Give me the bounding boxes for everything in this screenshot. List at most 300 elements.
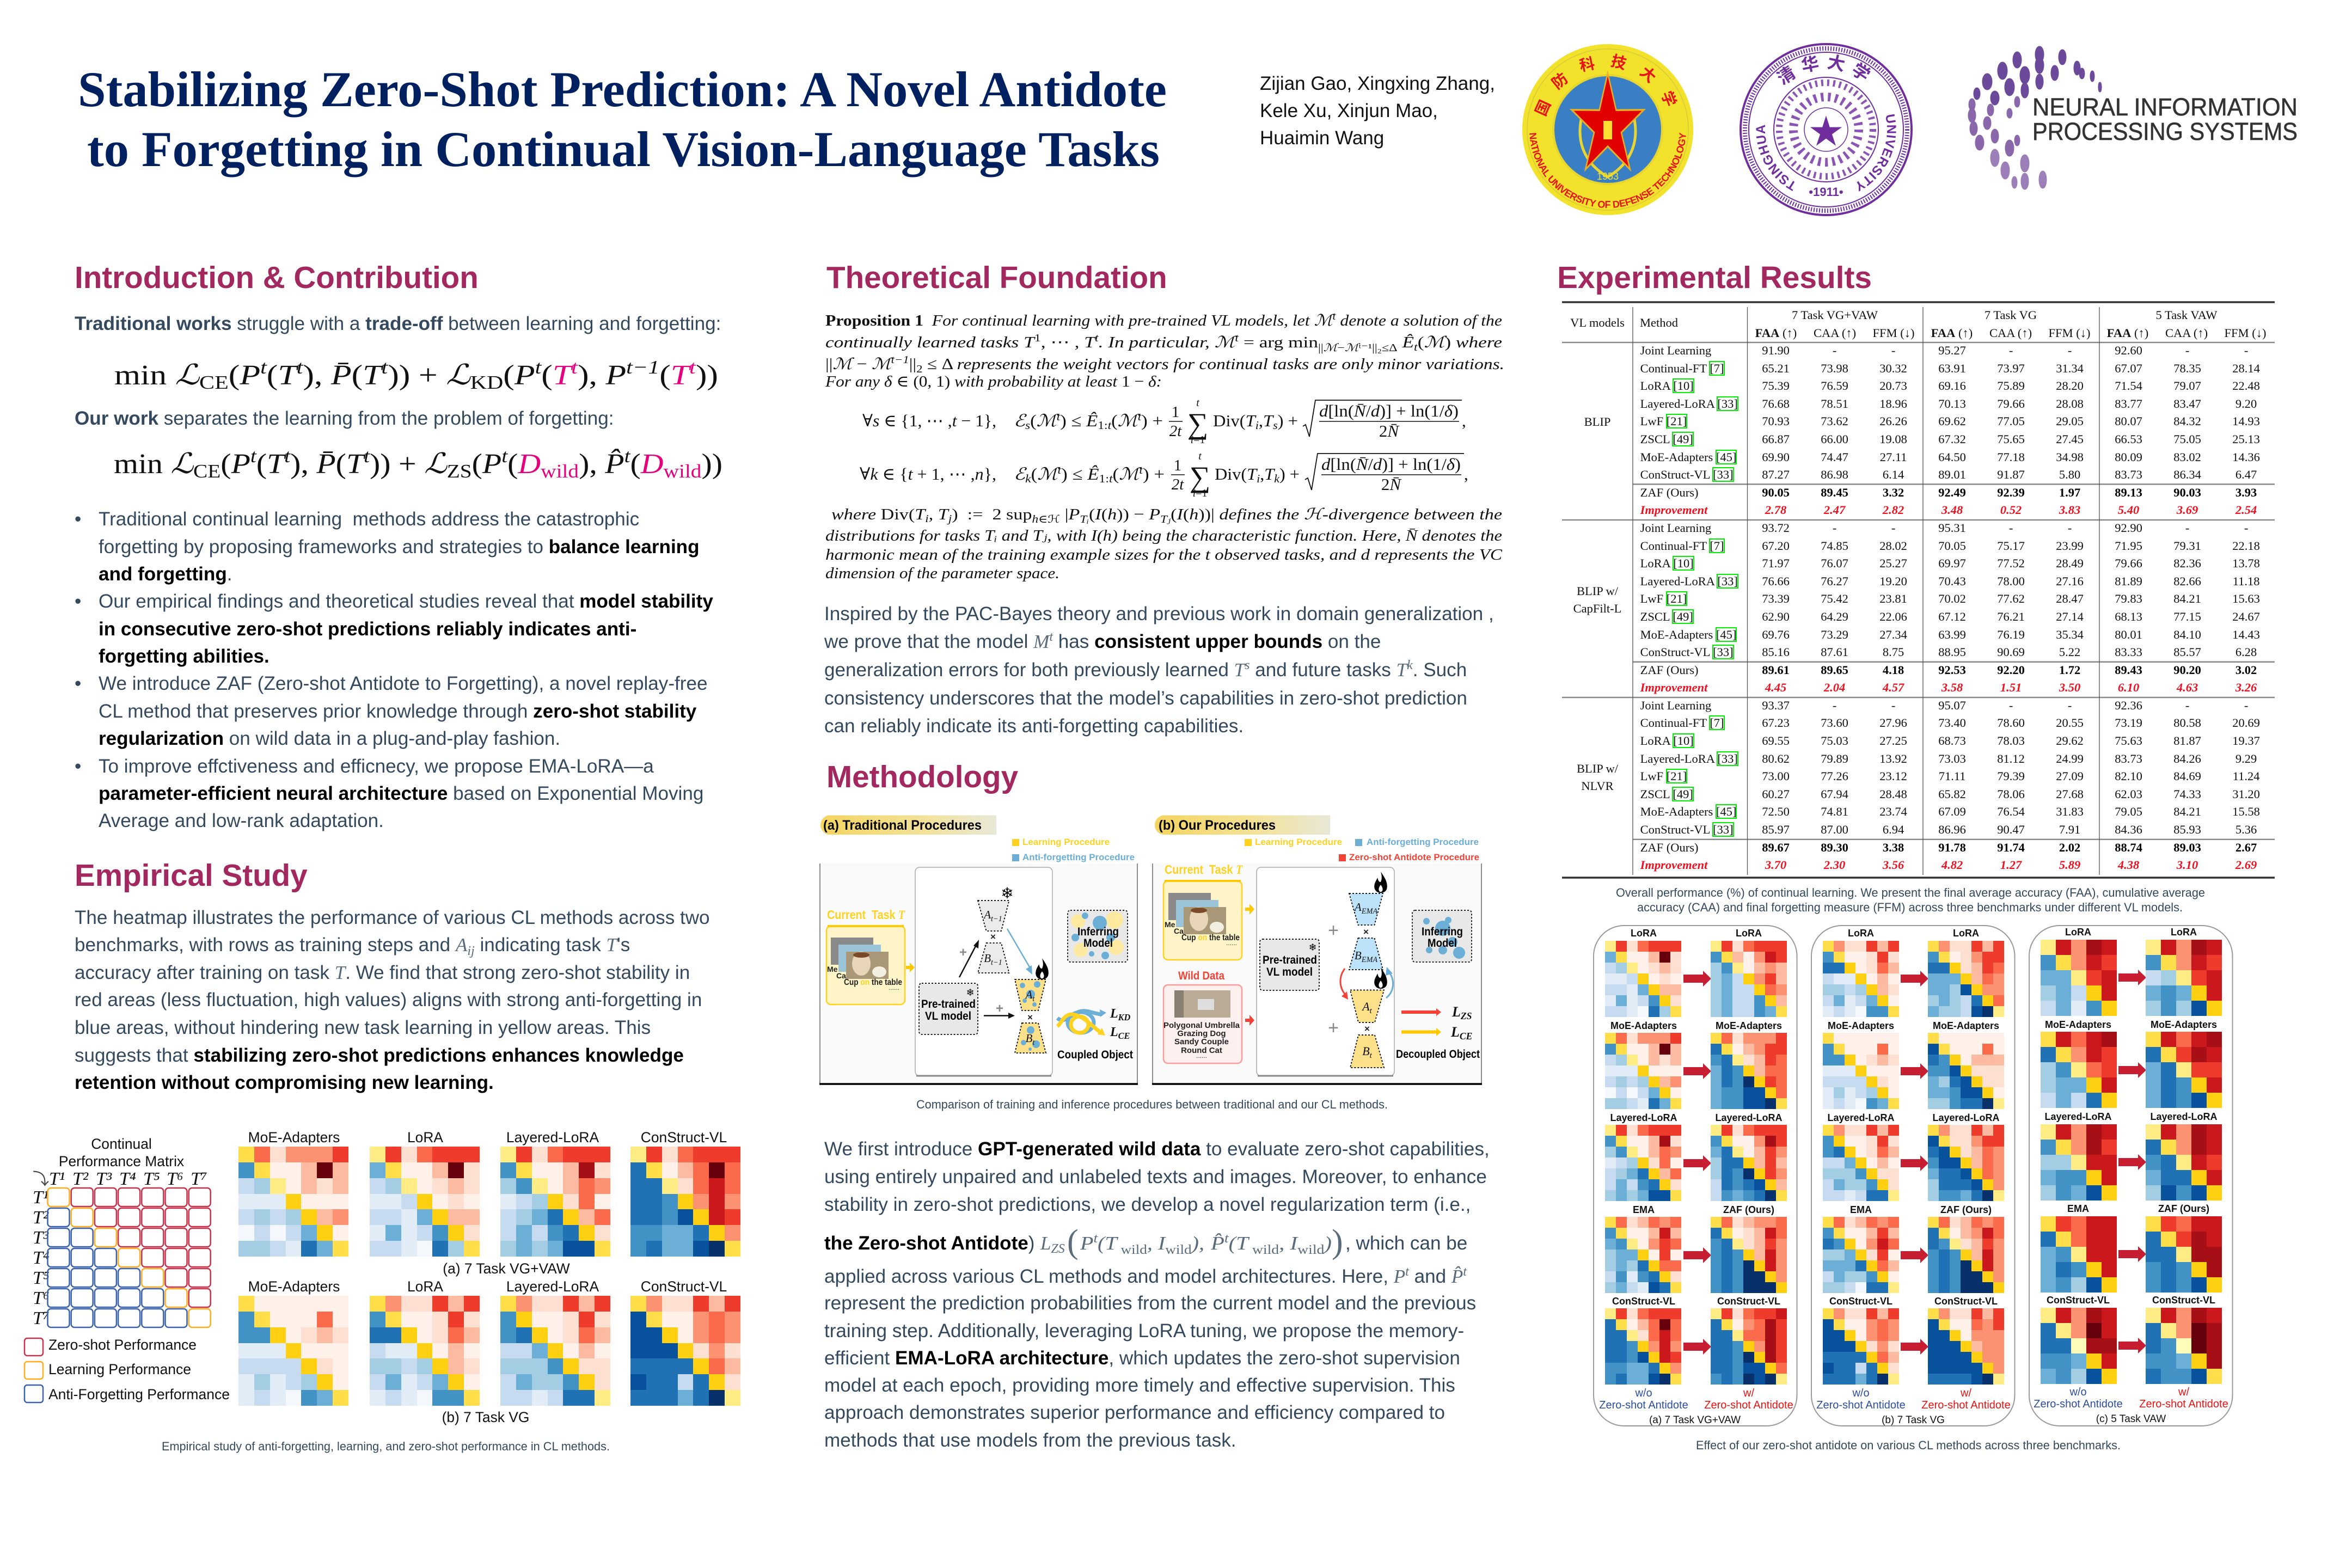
table: method rows and scores: 75.89: [1997, 379, 2025, 393]
equation: upper bound for previous tasks: ℰ: [1014, 411, 1027, 430]
diagram: continual performance matrix: Performance Matrix: [59, 1153, 184, 1169]
table: method rows and scores: 80.62: [1762, 752, 1790, 765]
table: method rows and scores: 92.90: [2115, 521, 2142, 535]
equation: upper bound for future tasks: i: [1257, 472, 1260, 485]
table: method rows and scores: 4.45: [1765, 681, 1786, 694]
table: method rows and scores: 73.98: [1821, 362, 1848, 375]
heat map: Layered-LoRA w/o: [2041, 1124, 2117, 1200]
table: method rows and scores: 3.32: [1883, 486, 1904, 499]
current LoRA blocks: B: [1362, 1044, 1370, 1058]
panel: (a) 7 Task VG+VAW antidote effect: LoRA: [1631, 928, 1657, 939]
table: method rows and scores: 78.00: [1997, 574, 2025, 588]
text: divergence definition: [825, 506, 1503, 582]
table: method rows and scores: 3.38: [1883, 841, 1904, 854]
text: methodology description: t: [1224, 1232, 1229, 1246]
table: method rows and scores: 27.45: [2056, 432, 2084, 446]
wild data box: Sandy Couple: [1174, 1037, 1229, 1046]
title: Stabilizing Zero-Shot Prediction: A Novel Antidote: [78, 62, 1167, 117]
text: methodology description: model at each epoch, providing more timely and effective supervision. This: [824, 1375, 1455, 1396]
heat map: Layered-LoRA w/o: [1605, 1125, 1681, 1201]
heat map: Layered-LoRA w/: [1928, 1125, 2004, 1201]
table: method rows and scores: Improvement: [1640, 503, 1707, 517]
text: divergence definition: h∈ℋ: [1032, 513, 1057, 525]
text: methodology description: and: [1409, 1266, 1451, 1287]
text: PAC-Bayes paragraph: generalization errors for both previously learned T: [824, 659, 1245, 681]
equation: upper bound for previous tasks: ℳ: [1118, 411, 1140, 430]
heat map: ConStruct-VL w/o: [1605, 1308, 1681, 1385]
table: method rows and scores: 93.37: [1762, 699, 1790, 712]
equation: our objective: (: [630, 449, 641, 480]
table: method rows and scores: 95.07: [1938, 699, 1966, 712]
inferring model: Model: [1428, 937, 1457, 950]
table: method rows and scores: 5.40: [2118, 503, 2139, 517]
decoupled losses: [1396, 1004, 1480, 1061]
table: method rows and scores: 6.28: [2235, 645, 2257, 659]
equation: our objective: min ℒ: [114, 449, 191, 480]
diagram: continual performance matrix: [33, 1136, 211, 1328]
table: method rows and scores: 22.48: [2232, 379, 2260, 393]
equation: traditional objective: t: [260, 356, 267, 378]
diagram: continual performance matrix: T⁴: [119, 1169, 136, 1189]
table: method rows and scores: 70.13: [1938, 397, 1966, 411]
equation: upper bound for future tasks: 2t: [1172, 476, 1184, 493]
equation: upper bound for future tasks: i=1: [1193, 487, 1207, 499]
logo: Tsinghua University: 清华大学: [1776, 54, 1871, 85]
heat map titles: ConStruct-VL: [641, 1129, 727, 1146]
logo: Tsinghua University: [1739, 43, 1913, 216]
table: method rows and scores: 20.73: [1879, 379, 1907, 393]
heat map: ZAF (Ours): [1928, 1217, 2004, 1293]
diagram: continual performance matrix: T²: [72, 1169, 89, 1189]
table: method rows and scores: -: [2185, 699, 2189, 712]
equation: upper bound for future tasks: ,: [1464, 464, 1468, 483]
table: method rows and scores: ConStruct-VL [33]: [1640, 823, 1734, 836]
table: method rows and scores: LwF [21]: [1640, 592, 1687, 605]
table: method rows and scores: 71.97: [1762, 556, 1790, 570]
table: method rows and scores: 76.66: [1762, 574, 1790, 588]
table: method rows and scores: 87.27: [1762, 468, 1790, 481]
panel: (a) 7 Task VG+VAW antidote effect: ZAF (Ours): [1723, 1204, 1774, 1215]
equation: upper bound for previous tasks: ℳ: [1037, 411, 1059, 430]
table: overall performance: FAA (↑): [1755, 326, 1797, 340]
text: methodology description: , which can be: [1345, 1233, 1467, 1254]
text: empirical study description: suggests that stabilizing zero-shot predictions enhances knowledge: [75, 1045, 684, 1066]
logo: Neural Information Processing Systems: NEURAL INFORMATION: [2032, 93, 2298, 121]
table: method rows and scores: 76.07: [1821, 556, 1848, 570]
text: proposition 1: denote a solution of the: [1336, 312, 1502, 329]
panel: (b) 7 Task VG antidote effect: ConStruct-VL: [1934, 1296, 1998, 1307]
heat map: ZAF (Ours): [2146, 1216, 2222, 1293]
bullet list: contributions: in consecutive zero-shot predictions reliably indicates anti-: [99, 618, 636, 640]
current task box: Ca: [836, 971, 846, 980]
table: method rows and scores: 78.60: [1997, 716, 2025, 730]
table: method rows and scores: 11.18: [2233, 574, 2259, 588]
diagram: continual performance matrix: T⁶: [33, 1288, 50, 1308]
text: methodology description: ZS: [1051, 1242, 1065, 1256]
table: method rows and scores: 77.26: [1821, 769, 1848, 783]
arrows: frozen and blue: +: [959, 945, 967, 960]
equation: upper bound for future tasks: ∑: [1190, 461, 1210, 493]
equation: upper bound for future tasks: ∀k ∈ {t + 1, ⋯ ,n},: [860, 464, 996, 483]
text: methodology description: ),: [1190, 1233, 1204, 1254]
inferring model: Model: [1083, 937, 1113, 950]
table: method rows and scores: MoE-Adapters [45]: [1640, 450, 1736, 464]
heat map: ConStruct-VL 7 Task VG: [630, 1296, 740, 1406]
table: overall performance: FFM (↓): [2225, 326, 2266, 340]
equation: upper bound for previous tasks: 1: [1172, 403, 1179, 421]
icon: flame: [1374, 872, 1387, 893]
equation: upper bound for previous tasks: d[ln(N̄/d)] + ln(1/δ): [1319, 401, 1459, 420]
wild data box: ......: [1196, 1052, 1207, 1059]
table: method rows and scores: -: [1891, 521, 1895, 535]
table: method rows and scores: 3.70: [1765, 858, 1786, 872]
current LoRA blocks: ×: [1027, 1012, 1033, 1022]
table: method rows and scores: ZAF (Ours): [1640, 663, 1698, 677]
authors: [1260, 73, 1495, 149]
heat map titles: MoE-Adapters: [248, 1129, 340, 1146]
text: PAC-Bayes paragraph: consistency underscores that the model’s capabilities in zero-shot prediction: [824, 688, 1467, 709]
table: method rows and scores: 77.62: [1997, 592, 2025, 605]
heat map: EMA: [1823, 1217, 1899, 1293]
text: proposition 1: t: [1332, 310, 1336, 322]
table: method rows and scores: 68.73: [1938, 734, 1966, 748]
text: methodology description: methods that use models from the previous task.: [824, 1430, 1236, 1451]
table: method rows and scores: 73.39: [1762, 592, 1790, 605]
table: method rows and scores: 22.18: [2232, 539, 2260, 553]
panel: (c) 5 Task VAW antidote effect: Layered-LoRA: [2044, 1111, 2112, 1122]
table: method rows and scores: 80.01: [2115, 627, 2142, 641]
table: method rows and scores: 15.63: [2232, 592, 2260, 605]
table: method rows and scores: 81.87: [2173, 734, 2201, 748]
table: method rows and scores: 72.50: [1762, 805, 1790, 818]
heat map: ConStruct-VL w/: [2146, 1308, 2222, 1384]
table: method rows and scores: -: [2185, 344, 2189, 357]
table: method rows and scores: 80.09: [2115, 450, 2142, 464]
equation: our objective: (: [507, 449, 518, 480]
current LoRA blocks: t: [1032, 1038, 1035, 1047]
logo: National University of Defense Technology: 1953: [1597, 171, 1619, 182]
equation: traditional objective: (: [503, 360, 514, 391]
legend: ours: [1245, 837, 1479, 862]
table: method rows and scores: 91.90: [1762, 344, 1790, 357]
text: proposition 1: t: [1414, 341, 1418, 353]
text: methodology description: [824, 1138, 1490, 1451]
current LoRA blocks: t: [1370, 1051, 1373, 1060]
table: method rows and scores: 76.54: [1997, 805, 2025, 818]
equation: traditional objective: KD: [470, 371, 503, 393]
table: method rows and scores: Joint Learning: [1640, 521, 1711, 535]
text: divergence definition: i: [925, 513, 929, 525]
text: methodology description: P̂: [1451, 1265, 1463, 1287]
loss labels: Coupled Object: [1057, 1049, 1133, 1061]
table: method rows and scores: 75.03: [1821, 734, 1848, 748]
table: overall performance: FAA (↑): [1931, 326, 1973, 340]
table: method rows and scores: LoRA [10]: [1640, 379, 1694, 393]
bullet list: contributions: •: [75, 509, 81, 530]
table: overall performance: CapFilt-L: [1573, 602, 1621, 615]
panel: (a) 7 Task VG+VAW antidote effect: [1594, 926, 1797, 1426]
table: method rows and scores: ConStruct-VL [33]: [1640, 468, 1734, 481]
equation: traditional objective: t: [297, 356, 304, 378]
table: method rows and scores: 27.34: [1879, 627, 1907, 641]
equation: upper bound for future tasks: 2N̄: [1381, 475, 1402, 494]
text: methodology description: , I: [1147, 1233, 1167, 1254]
heading: Empirical Study: Empirical Study: [75, 858, 308, 892]
table: method rows and scores: 81.12: [1997, 752, 2025, 765]
table: method rows and scores: 2.02: [2059, 841, 2080, 854]
equation: upper bound for future tasks: d[ln(N̄/d)] + ln(1/δ): [1321, 455, 1461, 474]
current task box: [826, 908, 905, 1004]
caption: results table: [1616, 886, 2205, 914]
current LoRA blocks: t: [1032, 995, 1035, 1003]
current task box: ......: [1226, 939, 1237, 947]
table: method rows and scores: ZSCL [49]: [1640, 432, 1693, 446]
table: method rows and scores: 89.30: [1821, 841, 1848, 854]
table: method rows and scores: 76.59: [1821, 379, 1848, 393]
text: methodology description: P: [1080, 1233, 1092, 1254]
diagram: continual performance matrix: T³: [96, 1169, 112, 1189]
equation: upper bound for future tasks: ) ≤: [1061, 464, 1087, 483]
pre-trained model: Pre-trained: [1263, 954, 1317, 966]
pre-trained model: [919, 983, 978, 1034]
table: method rows and scores: 71.54: [2115, 379, 2142, 393]
table: method rows and scores: 84.21: [2173, 592, 2201, 605]
equation: upper bound for future tasks: t: [1198, 450, 1202, 462]
arrows: frozen and blue: [959, 929, 1032, 977]
EMA LoRA blocks: EMA: [1361, 907, 1377, 916]
table: method rows and scores: 2.82: [1883, 503, 1904, 517]
legend: ours: Anti-forgetting Procedure: [1367, 837, 1479, 847]
pre-trained model: VL model: [925, 1010, 971, 1022]
heading: Introduction & Contribution: Introduction & Contribution: [75, 260, 479, 295]
table: method rows and scores: 27.11: [1880, 450, 1907, 464]
inferring model: Inferring: [1422, 926, 1463, 938]
table: method rows and scores: 69.76: [1762, 627, 1790, 641]
table: method rows and scores: 28.48: [1879, 787, 1907, 801]
table: method rows and scores: 14.43: [2232, 627, 2260, 641]
table: method rows and scores: 84.36: [2115, 823, 2142, 836]
EMA LoRA blocks: A: [1355, 901, 1362, 914]
equation: upper bound for future tasks: T: [1264, 464, 1276, 483]
table: method rows and scores: 3.50: [2059, 681, 2080, 694]
table: method rows and scores: 73.62: [1821, 414, 1848, 428]
panel: (c) 5 Task VAW antidote effect: EMA: [2067, 1203, 2089, 1214]
diagram: continual performance matrix: T⁷: [191, 1169, 207, 1189]
table: method rows and scores: 89.61: [1762, 663, 1790, 677]
table: method rows and scores: 5.22: [2059, 645, 2080, 659]
equation: traditional objective: t: [571, 356, 578, 378]
table: method rows and scores: 2.78: [1765, 503, 1786, 517]
text: proposition 1: T: [1084, 334, 1096, 351]
text: methodology description: efficient EMA-LoRA architecture, which updates the zero-shot supervision: [824, 1347, 1460, 1369]
text: proposition 1: t: [1095, 332, 1099, 344]
table: method rows and scores: Joint Learning: [1640, 699, 1711, 712]
caption: empirical study: Empirical study of anti-forgetting, learning, and zero-shot performance in CL methods.: [162, 1440, 610, 1453]
heat map: MoE-Adapters w/o: [1823, 1033, 1899, 1109]
table: method rows and scores: 64.50: [1938, 450, 1966, 464]
tag: our procedures: (b) Our Procedures: [1159, 818, 1276, 833]
equation: upper bound for future tasks: ,: [1260, 464, 1264, 483]
equation: upper bound for previous tasks: ∀s ∈ {1, ⋯ ,t − 1},: [862, 411, 996, 430]
table: method rows and scores: 26.26: [1879, 414, 1907, 428]
text: divergence definition: P: [1068, 506, 1080, 523]
equation: upper bound for future tasks: ℳ: [1037, 464, 1060, 483]
panel: (c) 5 Task VAW antidote effect: ConStruct-VL: [2152, 1295, 2215, 1306]
heading: Methodology: Methodology: [826, 759, 1019, 794]
table: method rows and scores: 76.27: [1821, 574, 1848, 588]
text: proposition 1: represents the weight vectors for continual tasks are only minor variations.: [957, 356, 1504, 373]
equation: our objective: t: [284, 445, 291, 467]
equation: upper bound for previous tasks: ) +: [1141, 411, 1163, 430]
table: method rows and scores: 66.00: [1821, 432, 1848, 446]
table: method rows and scores: 86.98: [1821, 468, 1848, 481]
table: method rows and scores: 92.39: [1997, 486, 2025, 499]
table: method rows and scores: 77.52: [1997, 556, 2025, 570]
table: method rows and scores: ZSCL [49]: [1640, 787, 1693, 801]
table: method rows and scores: 2.54: [2235, 503, 2257, 517]
diagram: continual performance matrix: T⁴: [33, 1248, 50, 1268]
table: method rows and scores: 79.07: [2173, 379, 2201, 393]
table: overall performance: NLVR: [1581, 779, 1614, 793]
table: method rows and scores: 66.53: [2115, 432, 2142, 446]
heat map: LoRA 7 Task VG: [370, 1296, 480, 1406]
heat map: MoE-Adapters 7 Task VG+VAW: [238, 1147, 348, 1257]
table: method rows and scores: 22.06: [1879, 610, 1907, 623]
equation: upper bound for future tasks: 1: [1174, 457, 1181, 474]
text: proposition 1: 1: [1034, 332, 1041, 344]
text: methodology description: ): [1332, 1223, 1343, 1260]
table: method rows and scores: 89.03: [2173, 841, 2201, 854]
text: methodology description: We first introduce GPT-generated wild data to evaluate zero-shot capabilities,: [824, 1138, 1490, 1160]
heat map: MoE-Adapters w/: [1711, 1033, 1787, 1109]
text: divergence definition: ,: [929, 506, 938, 523]
panel: (a) 7 Task VG+VAW antidote effect: Layered-LoRA: [1715, 1112, 1783, 1123]
equation: upper bound for previous tasks: Ê: [1086, 411, 1098, 430]
text: PAC-Bayes paragraph: Inspired by the PAC-Bayes theory and previous work in domain generalization ,: [824, 603, 1494, 624]
panel: (c) 5 Task VAW antidote effect: Zero-shot Antidote: [2139, 1398, 2228, 1410]
text: methodology description: wild: [1248, 1243, 1279, 1257]
current task box: Current Task T: [1165, 862, 1243, 877]
table: overall performance: BLIP w/: [1577, 762, 1619, 775]
equation: upper bound for future tasks: ) +: [1143, 464, 1165, 483]
pre-trained model: ❄: [966, 987, 975, 999]
table: method rows and scores: 75.42: [1821, 592, 1848, 605]
text: divergence definition: I(h)) − P: [1095, 506, 1159, 523]
table: method rows and scores: 7.91: [2059, 823, 2080, 836]
heat map: ConStruct-VL w/o: [1823, 1308, 1899, 1385]
table: method rows and scores: -: [2068, 521, 2072, 535]
table: method rows and scores: MoE-Adapters [45]: [1640, 627, 1736, 641]
table: method rows and scores: 83.73: [2115, 468, 2142, 481]
text: divergence definition: ) := 2 sup: [952, 506, 1032, 523]
bullet list: contributions: Traditional continual learning methods address the catastrophic: [99, 509, 639, 530]
table: overall performance: Method: [1640, 316, 1678, 329]
equation: upper bound for previous tasks: [862, 397, 1466, 446]
tag: traditional procedures: (a) Traditional Procedures: [823, 818, 982, 833]
equation: upper bound for previous tasks: (: [1030, 411, 1037, 430]
table: method rows and scores: MoE-Adapters [45]: [1640, 805, 1736, 818]
heat map: ZAF (Ours): [1711, 1217, 1787, 1293]
heat map titles: Layered-LoRA: [506, 1129, 599, 1146]
table: method rows and scores: 76.19: [1997, 627, 2025, 641]
table: method rows and scores: 70.43: [1938, 574, 1966, 588]
heat map: ConStruct-VL w/: [1711, 1308, 1787, 1385]
text: proposition 1: ≤ Δ: [923, 356, 957, 373]
panel: (c) 5 Task VAW antidote effect: LoRA: [2171, 927, 2197, 938]
panel: (c) 5 Task VAW antidote effect: w/o: [2069, 1386, 2087, 1398]
table: method rows and scores: 64.29: [1821, 610, 1848, 623]
authors: Zijian Gao, Xingxing Zhang,: [1260, 73, 1495, 94]
table: method rows and scores: 84.26: [2173, 752, 2201, 765]
table: method rows and scores: 84.32: [2173, 414, 2201, 428]
heat map: LoRA w/: [1928, 941, 2004, 1017]
current LoRA blocks: [1015, 979, 1046, 1053]
diagram (b): our procedures: +: [1328, 920, 1339, 941]
pre-trained model: ❄: [1308, 942, 1317, 953]
table: method rows and scores: 85.97: [1762, 823, 1790, 836]
table: method rows and scores: 27.68: [2056, 787, 2084, 801]
table: method rows and scores: 66.87: [1762, 432, 1790, 446]
text: methodology description: P̂: [1211, 1233, 1222, 1254]
panel: (b) 7 Task VG antidote effect: Layered-LoRA: [1932, 1112, 2000, 1123]
text: our work: Our work separates the learning from the problem of forgetting:: [75, 408, 614, 429]
table: method rows and scores: 73.03: [1938, 752, 1966, 765]
table: method rows and scores: 83.02: [2173, 450, 2201, 464]
diagram: continual performance matrix: T⁶: [167, 1169, 183, 1189]
table: method rows and scores: 92.20: [1997, 663, 2025, 677]
table: method rows and scores: Layered-LoRA [33]: [1640, 752, 1738, 765]
table: method rows and scores: 73.60: [1821, 716, 1848, 730]
current LoRA blocks: A: [1026, 988, 1032, 1001]
heat map: Layered-LoRA 7 Task VG+VAW: [500, 1147, 610, 1257]
table: method rows and scores: 9.20: [2235, 397, 2257, 411]
table: method rows and scores: 23.81: [1879, 592, 1907, 605]
table: method rows and scores: 62.90: [1762, 610, 1790, 623]
EMA LoRA blocks: B: [1355, 949, 1362, 962]
table: method rows and scores: 3.56: [1883, 858, 1904, 872]
heat map: MoE-Adapters 7 Task VG: [238, 1296, 348, 1406]
table: method rows and scores: 31.83: [2056, 805, 2084, 818]
table: method rows and scores: 84.10: [2173, 627, 2201, 641]
table: method rows and scores: 88.95: [1938, 645, 1966, 659]
equation: traditional objective: P: [239, 360, 260, 391]
frozen previous LoRA: B: [984, 952, 991, 965]
table: method rows and scores: 1.97: [2059, 486, 2080, 499]
table: method rows and scores: 73.19: [2115, 716, 2142, 730]
table: overall performance: FAA (↑): [2107, 326, 2148, 340]
caption: results table: Overall performance (%) of continual learning. We present the final average accuracy (FAA), cumulative average: [1616, 886, 2205, 899]
arrows: EMA update and supervision: [1340, 967, 1393, 1000]
table: method rows and scores: 69.55: [1762, 734, 1790, 748]
arrow: task to model: [906, 963, 915, 972]
table: method rows and scores: 90.47: [1997, 823, 2025, 836]
equation: traditional objective: (: [229, 360, 240, 391]
panel: (b) 7 Task VG antidote effect: MoE-Adapters: [1933, 1020, 1999, 1031]
text: methodology description: t: [1093, 1232, 1099, 1246]
table: method rows and scores: [1633, 342, 2276, 874]
table: method rows and scores: 79.39: [1997, 769, 2025, 783]
panel: (b) 7 Task VG antidote effect: w/o: [1852, 1387, 1870, 1399]
table: method rows and scores: 15.58: [2232, 805, 2260, 818]
table: method rows and scores: 74.33: [2173, 787, 2201, 801]
table: method rows and scores: 74.85: [1821, 539, 1848, 553]
text: traditional works: Traditional works struggle with a trade-off between learning and forgetting:: [75, 313, 721, 334]
table: method rows and scores: 67.07: [2115, 362, 2142, 375]
equation: upper bound for previous tasks: Div(T: [1213, 411, 1255, 430]
panel: (a) 7 Task VG+VAW antidote effect: w/: [1743, 1387, 1754, 1399]
table: method rows and scores: ZAF (Ours): [1640, 486, 1698, 499]
table: method rows and scores: 69.16: [1938, 379, 1966, 393]
